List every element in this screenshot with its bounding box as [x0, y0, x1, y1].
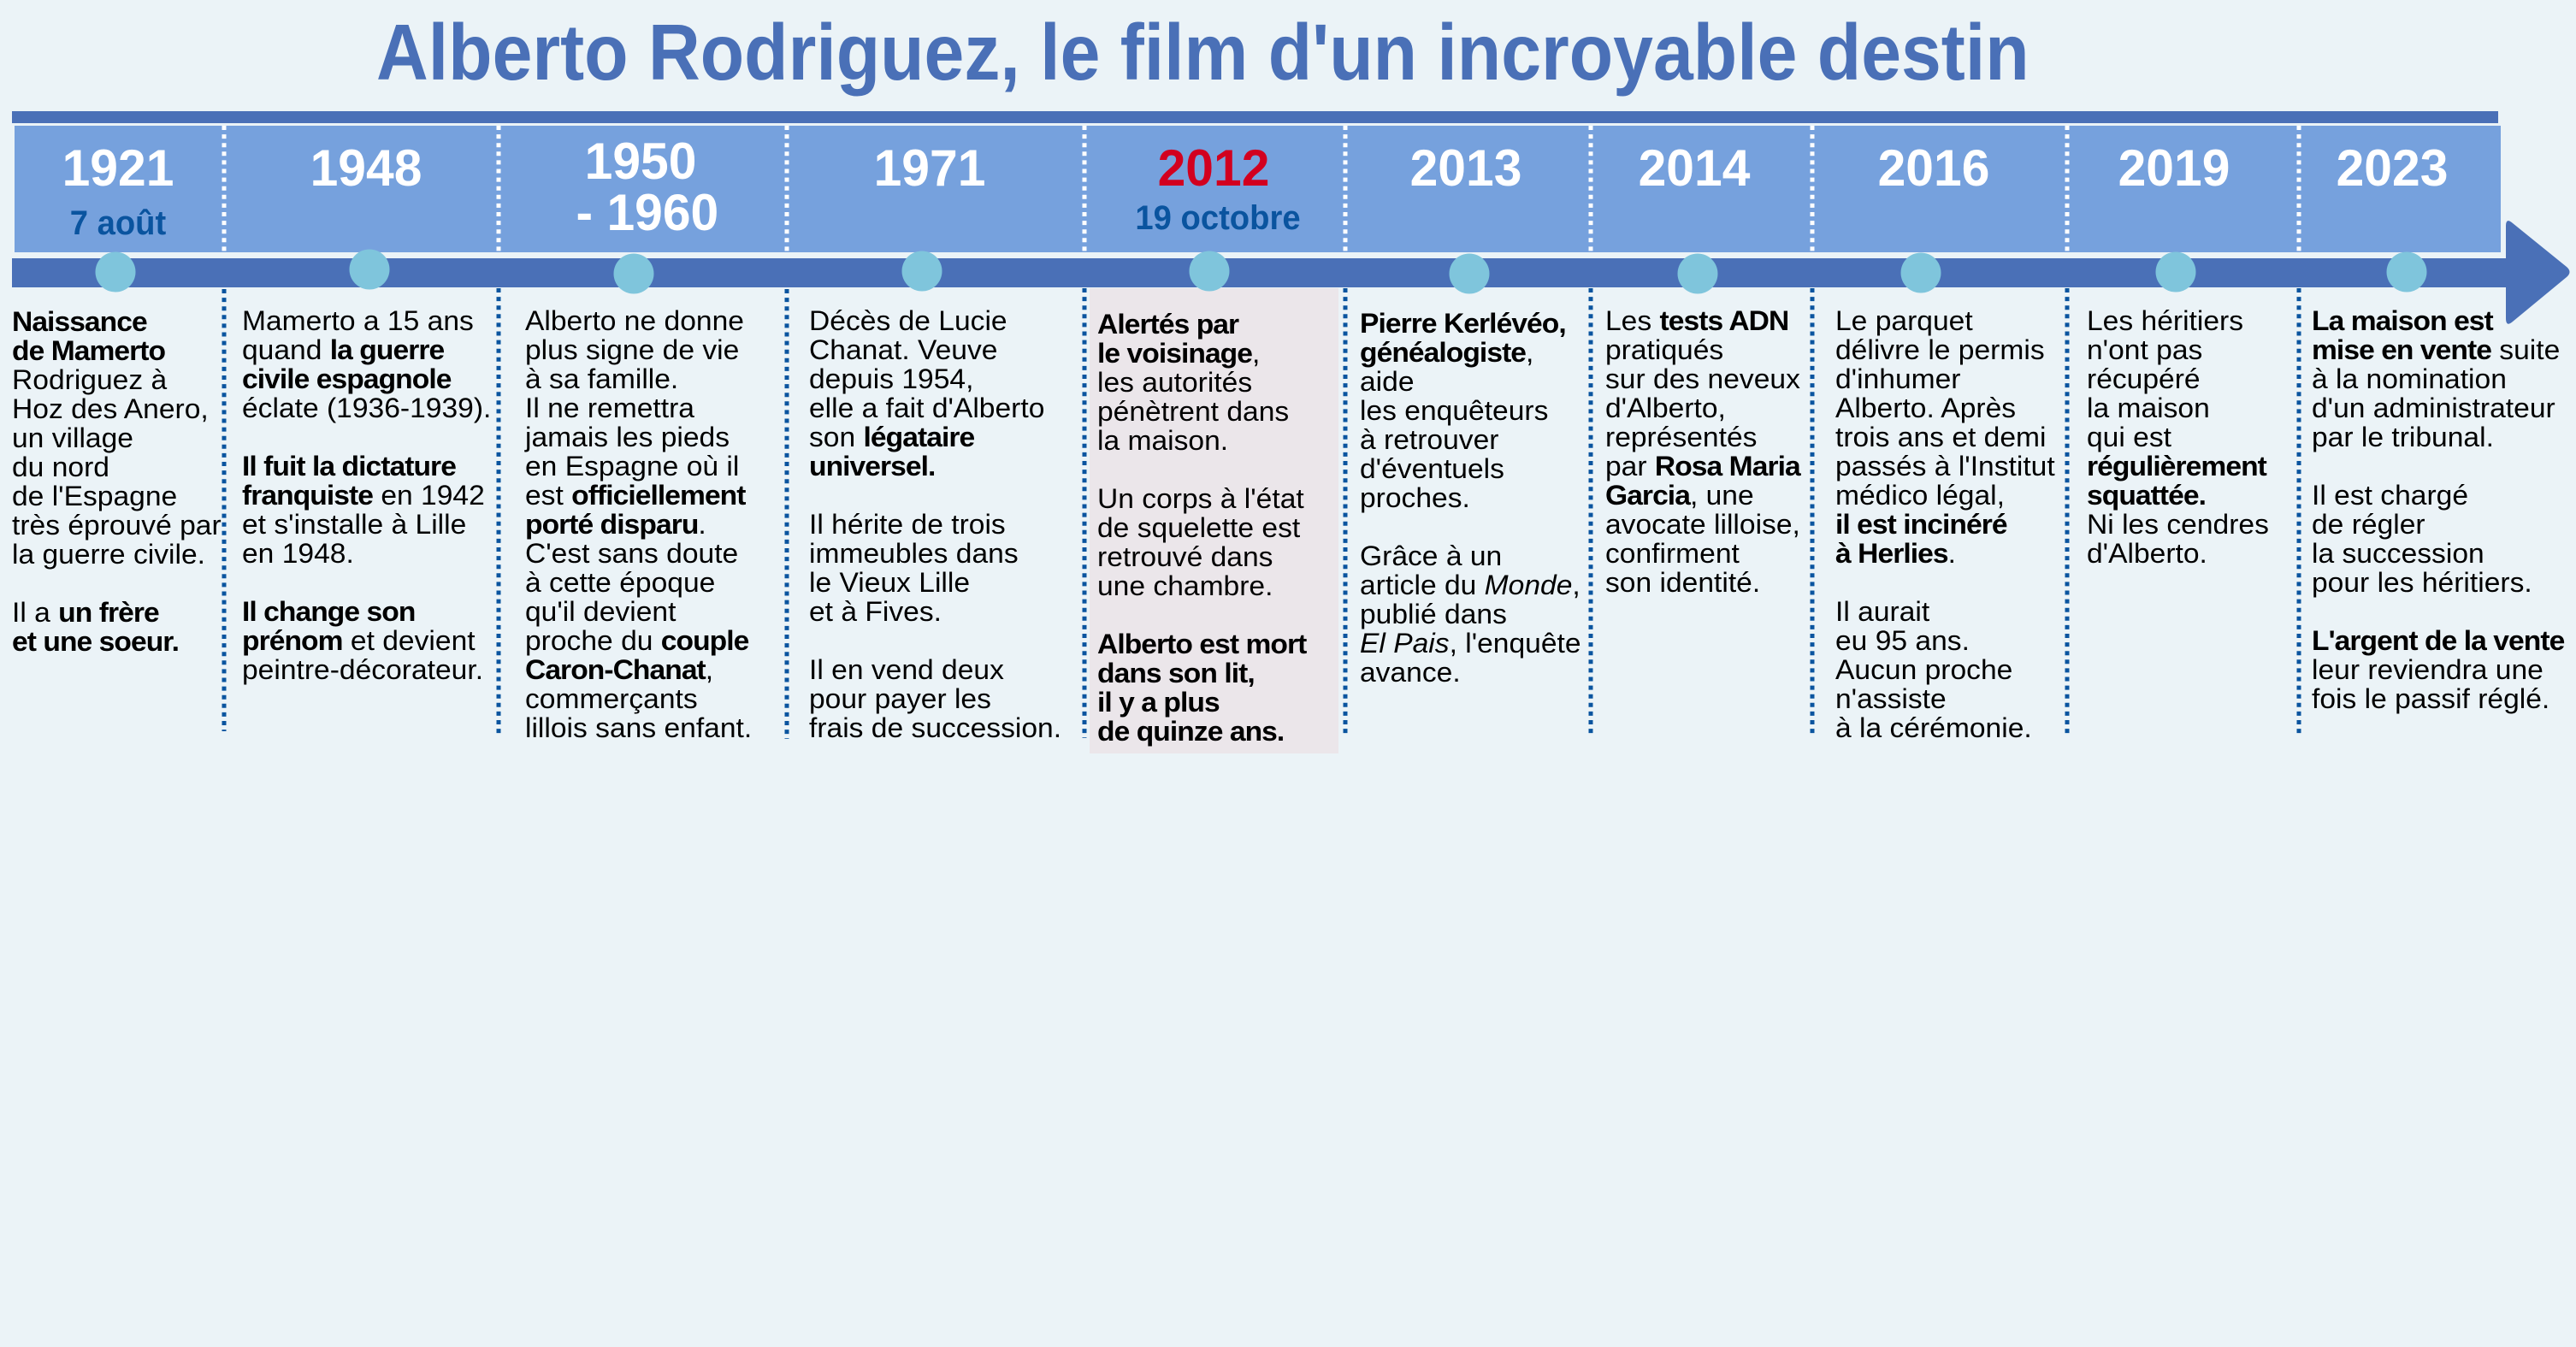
text: 2016: Alberto. Après: [1835, 393, 2016, 423]
text: 2023: à la nomination: [2312, 363, 2507, 394]
text: 1971: [809, 305, 1061, 743]
text: 2023: leur reviendra une: [2312, 654, 2544, 685]
text: 2019: d'Alberto.: [2087, 538, 2207, 569]
text: 2013: proches.: [1360, 482, 1470, 513]
text: 1950-1960: à cette époque: [525, 567, 715, 598]
text: 2012: Alertés par: [1097, 309, 1238, 340]
text: 2019: la maison: [2087, 393, 2210, 423]
text: 2014: [1605, 305, 1801, 598]
text: 2016: [1835, 305, 2055, 743]
column dividers: [224, 288, 2299, 739]
text: 2012: Un corps à l'état: [1097, 483, 1304, 514]
text: 1921: de l'Espagne: [12, 481, 177, 511]
text: 1950-1960: qu'il devient: [525, 596, 676, 627]
text: 2014: confirment: [1605, 538, 1740, 569]
text: 2014: Garcia, une: [1605, 480, 1754, 511]
text: 2023: de régler: [2312, 509, 2425, 540]
year: 2016: 2016: [1878, 139, 1989, 197]
text: 2013: El Pais, l'enquête: [1360, 628, 1581, 659]
text: 1948: en 1948.: [242, 538, 354, 569]
text: 2012: pénètrent dans: [1097, 396, 1289, 427]
text: 2019: régulièrement: [2087, 451, 2266, 481]
text: 2014: Les tests ADN: [1605, 305, 1788, 336]
text: 2013: à retrouver: [1360, 424, 1498, 455]
arrow: timeline axis: [12, 221, 2569, 324]
text: 2012: Alberto est mort: [1097, 629, 1306, 659]
text: 2019: Ni les cendres: [2087, 509, 2269, 540]
text: 2016: passés à l'Institut: [1835, 451, 2055, 481]
text: 1950-1960: proche du couple: [525, 625, 748, 656]
text: 1948: Il fuit la dictature: [242, 451, 456, 481]
text: 2013: généalogiste,: [1360, 337, 1533, 368]
text: 1950-1960: est officiellement: [525, 480, 746, 511]
text: 2014: par Rosa Maria: [1605, 451, 1800, 481]
date: 19 octobre: 19 octobre: [1135, 199, 1301, 237]
text: 1971: et à Fives.: [809, 596, 942, 627]
text: 2012: il y a plus: [1097, 687, 1220, 718]
year: 1950 - 1960: 1950: [585, 133, 696, 190]
text: 2016: d'inhumer: [1835, 363, 1960, 394]
date: 7 août: 7 août: [70, 204, 166, 242]
text: 2023: fois le passif réglé.: [2312, 683, 2549, 714]
text: 2014: avocate lilloise,: [1605, 509, 1800, 540]
header dividers: [224, 126, 2299, 251]
text: 1971: Il hérite de trois: [809, 509, 1006, 540]
text: 1971: le Vieux Lille: [809, 567, 970, 598]
text: 2016: Il aurait: [1835, 596, 1929, 627]
text: 2013: aide: [1360, 366, 1415, 397]
text: 1950-1960: jamais les pieds: [525, 422, 730, 452]
text: 1921: un village: [12, 422, 133, 453]
text: 2012: le voisinage,: [1097, 338, 1260, 369]
text: 2013: article du Monde,: [1360, 570, 1580, 600]
text: 1950-1960: plus signe de vie: [525, 334, 739, 365]
text: 1950-1960: lillois sans enfant.: [525, 712, 752, 743]
text: 2019: n'ont pas: [2087, 334, 2202, 365]
text: 1921: la guerre civile.: [12, 539, 205, 570]
text: 2023: La maison est: [2312, 305, 2493, 336]
year: 2013: 2013: [1410, 139, 1521, 197]
year: 2019: 2019: [2118, 139, 2230, 197]
year: 2012: 2012: [1158, 139, 1269, 197]
text: 2013: avance.: [1360, 657, 1461, 688]
year: 1971: 1971: [874, 139, 985, 197]
text: 2013: publié dans: [1360, 599, 1507, 629]
text: 1950-1960: porté disparu.: [525, 509, 706, 540]
text: 1950-1960: commerçants: [525, 683, 698, 714]
text: 2019: Les héritiers: [2087, 305, 2243, 336]
text: 2023: d'un administrateur: [2312, 393, 2555, 423]
text: 1950-1960: Alberto ne donne: [525, 305, 744, 336]
text: 1921: [12, 306, 222, 657]
text: 2016: Aucun proche: [1835, 654, 2012, 685]
text: 1948: [242, 305, 491, 685]
text: 1921: de Mamerto: [12, 335, 165, 366]
text: 1971: depuis 1954,: [809, 363, 973, 394]
text: 2016: médico légal,: [1835, 480, 2005, 511]
text: 1948: prénom et devient: [242, 625, 476, 656]
text: 1948: et s'installe à Lille: [242, 509, 466, 540]
text: 2023: [2312, 305, 2564, 714]
text: 2023: mise en vente suite: [2312, 334, 2560, 365]
text: 2016: délivre le permis: [1835, 334, 2045, 365]
year: 1950 - 1960: - 1960: [576, 184, 718, 241]
text: 1948: Il change son: [242, 596, 415, 627]
text: 2013: les enquêteurs: [1360, 395, 1548, 426]
year: 1948: 1948: [310, 139, 422, 197]
text: 2014: représentés: [1605, 422, 1757, 452]
text: 2013: d'éventuels: [1360, 453, 1504, 484]
text: 1971: Chanat. Veuve: [809, 334, 997, 365]
text: 2012: de squelette est: [1097, 512, 1300, 543]
text: 1950-1960: [524, 305, 752, 743]
text: 1971: Décès de Lucie: [809, 305, 1007, 336]
text: 1921: du nord: [12, 452, 109, 482]
text: 2014: sur des neveux: [1605, 363, 1800, 394]
text: 2019: squattée.: [2087, 480, 2206, 511]
text: 1950-1960: à sa famille.: [525, 363, 678, 394]
text: 2012: une chambre.: [1097, 570, 1273, 601]
text: 2023: L'argent de la vente: [2312, 625, 2564, 656]
text: 1948: quand la guerre: [242, 334, 444, 365]
year: 1950 - 1960: [576, 133, 718, 241]
text: 1921: Hoz des Anero,: [12, 393, 209, 424]
text: 1950-1960: Caron-Chanat,: [525, 654, 713, 685]
text: 1971: frais de succession.: [809, 712, 1061, 743]
text: 1921: Rodriguez à: [12, 364, 167, 395]
text: 1948: peintre-décorateur.: [242, 654, 483, 685]
text: 1948: éclate (1936-1939).: [242, 393, 491, 423]
text: 2012: de quinze ans.: [1097, 716, 1284, 747]
text: 2012: la maison.: [1097, 425, 1228, 456]
text: 2016: eu 95 ans.: [1835, 625, 1970, 656]
text: 1921: Il a un frère: [12, 597, 159, 628]
text: 2014: d'Alberto,: [1605, 393, 1726, 423]
text: 2023: la succession: [2312, 538, 2484, 569]
text: 1921: et une soeur.: [12, 626, 179, 657]
text: 2013: Grâce à un: [1360, 541, 1502, 571]
year: 2023: 2023: [2337, 139, 2448, 197]
text: 1950-1960: Il ne remettra: [525, 393, 694, 423]
text: 1950-1960: C'est sans doute: [525, 538, 738, 569]
timeline markers: [96, 250, 2427, 294]
text: 1971: Il en vend deux: [809, 654, 1004, 685]
text: 2023: par le tribunal.: [2312, 422, 2494, 452]
text: 1948: franquiste en 1942: [242, 480, 485, 511]
year: 2014: 2014: [1639, 139, 1750, 197]
text: 2014: pratiqués: [1605, 334, 1723, 365]
text: 2016: Le parquet: [1835, 305, 1973, 336]
text: 2012: les autorités: [1097, 367, 1252, 398]
text: 1971: immeubles dans: [809, 538, 1019, 569]
text: 1971: pour payer les: [809, 683, 991, 714]
header band: [15, 126, 2501, 252]
text: 1971: universel.: [809, 451, 935, 481]
text: 2012: dans son lit,: [1097, 658, 1255, 688]
year: 1921: 1921: [62, 139, 174, 197]
text: 2016: à la cérémonie.: [1835, 712, 2032, 743]
text: 2019: qui est: [2087, 422, 2171, 452]
text: 2023: Il est chargé: [2312, 480, 2468, 511]
text: 1948: Mamerto a 15 ans: [242, 305, 474, 336]
highlight panel: 2012: [1090, 288, 1338, 753]
text: 1948: civile espagnole: [242, 363, 451, 394]
text: 2016: trois ans et demi: [1835, 422, 2047, 452]
text: 1971: elle a fait d'Alberto: [809, 393, 1044, 423]
text: 2016: il est incinéré: [1835, 509, 2007, 540]
text: 1921: très éprouvé par: [12, 510, 222, 541]
text: 2019: récupéré: [2087, 363, 2201, 394]
title: Alberto Rodriguez, le film d'un incroyable destin: [376, 8, 2029, 97]
text: 2014: son identité.: [1605, 567, 1760, 598]
text: 1921: Naissance: [12, 306, 147, 337]
text: 2012: [1097, 309, 1307, 747]
text: 2023: pour les héritiers.: [2312, 567, 2532, 598]
text: 1950-1960: en Espagne où il: [525, 451, 739, 481]
text: 2016: à Herlies.: [1835, 538, 1956, 569]
text: 1971: son légataire: [809, 422, 974, 452]
text: 2016: n'assiste: [1835, 683, 1947, 714]
text: 2013: [1360, 308, 1581, 688]
text: 2012: retrouvé dans: [1097, 541, 1273, 572]
text: 2019: [2087, 305, 2269, 569]
top bar: [12, 111, 2498, 123]
text: 2013: Pierre Kerlévéo,: [1360, 308, 1566, 339]
